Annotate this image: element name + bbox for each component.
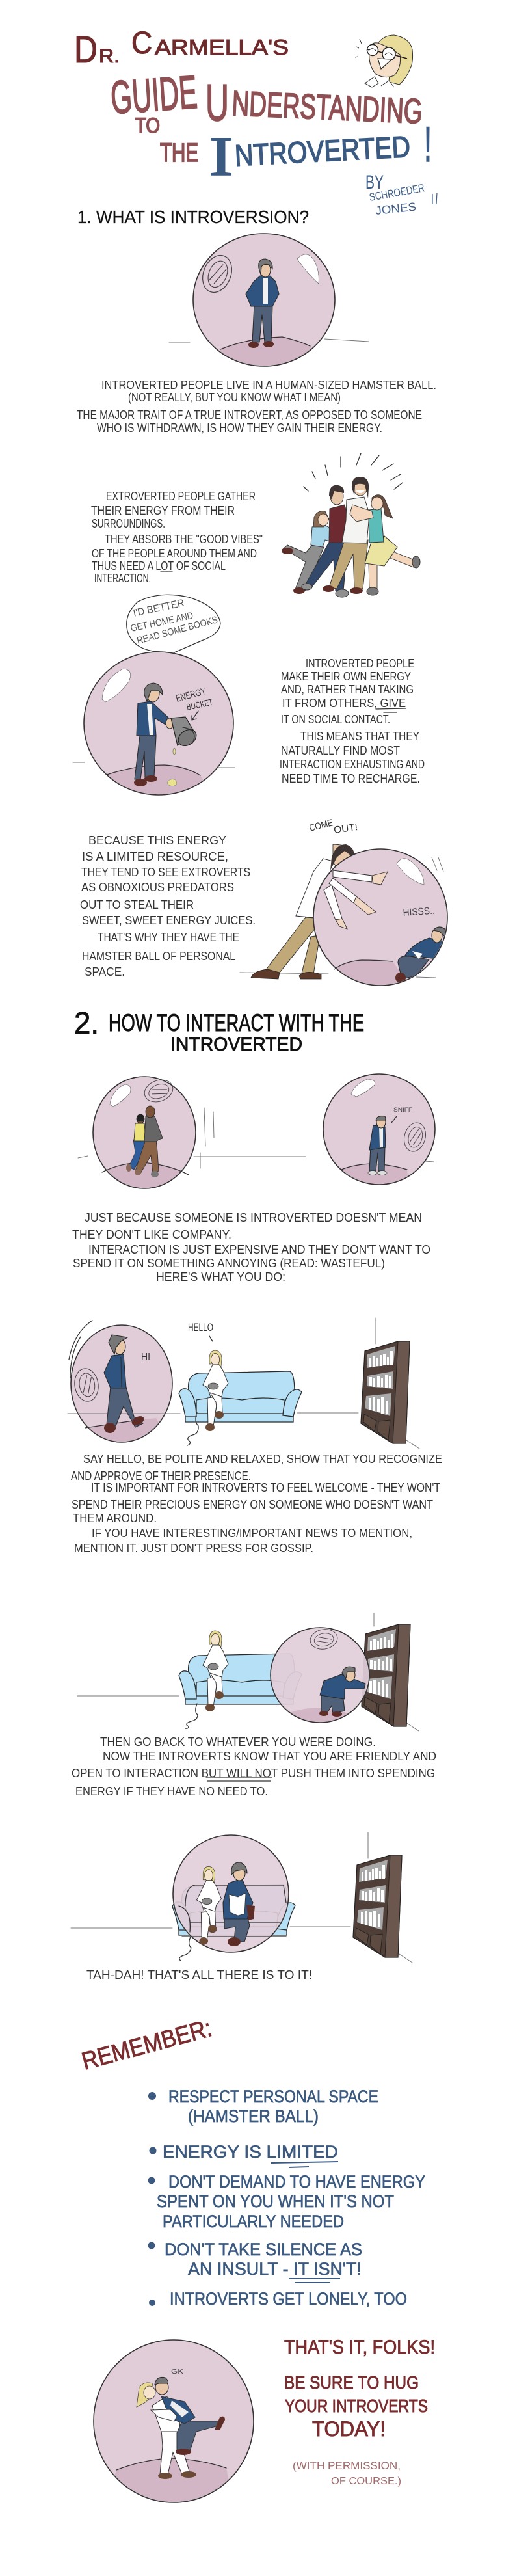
byline: [365, 172, 437, 217]
panel: extrovert pressing on hamster ball: [240, 817, 447, 995]
cord: [179, 1937, 191, 1961]
panel: introvert walks past doctor on couch: [68, 1318, 419, 1451]
text block: go back: OPEN TO INTERACTION BUT WILL NOT PUSH THEM INTO SPENDING: [72, 1767, 435, 1780]
text block: limited resource: BECAUSE THIS ENERGY: [88, 834, 226, 847]
title line: Dr. Carmella's: D: [74, 29, 98, 71]
cord: [185, 1704, 198, 1728]
text block: closing message: YOUR INTROVERTS: [285, 2396, 428, 2416]
point: silence is no insult: DON'T TAKE SILENCE AS: [165, 2240, 362, 2259]
title line: Introverted!: I: [209, 125, 233, 187]
ball floor: [108, 765, 203, 794]
point: energy is limited: ENERGY IS LIMITED: [163, 2142, 338, 2162]
cord: [187, 1412, 198, 1445]
ball floor: [342, 1164, 408, 1184]
ball logo: [198, 251, 237, 297]
caption: hi: HI: [141, 1352, 150, 1363]
text block: extroverts: EXTROVERTED PEOPLE GATHER: [106, 490, 256, 503]
text block: say hello: SPEND THEIR PRECIOUS ENERGY ON SOMEONE WHO DOESN'T WANT: [72, 1498, 433, 1511]
text block: introverts make energy: IT FROM OTHERS, GIVE: [282, 697, 406, 710]
text block: tah-dah: TAH-DAH! THAT'S ALL THERE IS TO IT!: [86, 1968, 312, 1981]
heading: 2. How to interact with the introverted: HOW TO INTERACT WITH THE: [109, 1010, 364, 1036]
title line: Guide to Understanding: NDERSTANDING: [231, 84, 423, 131]
panel: reading together on couch: [71, 1832, 412, 1963]
text block: limited resource: THEY TEND TO SEE EXTROVERTS: [81, 866, 250, 879]
ball floor: [337, 960, 406, 985]
figure: introvert pouring bucket: [134, 683, 174, 786]
figure: doctor and introvert hugging: [137, 2377, 225, 2479]
label: energy bucket: [175, 686, 214, 720]
title line: Introverted!: !: [424, 117, 432, 172]
text block: introverts make energy: IT ON SOCIAL CONTACT.: [281, 713, 390, 726]
title line: Guide to Understanding: [109, 66, 423, 167]
ball logo: [309, 1628, 339, 1651]
caption: hisss: HISSS..: [403, 906, 435, 919]
figure: doctor seated: [203, 1350, 228, 1431]
text block: closing message: THAT'S IT, FOLKS!: [284, 2337, 435, 2358]
text block: introverts make energy: THIS MEANS THAT THEY: [300, 730, 419, 743]
caption: come out: COME: [308, 817, 334, 834]
text block: extroverts: INTERACTION.: [94, 572, 151, 585]
text block: extroverts: THEY ABSORB THE "GOOD VIBES": [105, 533, 263, 546]
illustration: group of extroverts hugging: [282, 453, 420, 597]
text block: introverts make energy: MAKE THEIR OWN ENERGY: [281, 670, 411, 683]
text block: introverts make energy: NEED TIME TO RECHARGE.: [282, 772, 420, 785]
title line: Introverted!: [209, 117, 432, 187]
text block: limited resource: SPACE.: [85, 965, 125, 978]
caption: sniff: SNIFF: [393, 1107, 413, 1113]
text block: just because: HERE'S WHAT YOU DO:: [156, 1270, 285, 1283]
text block: say hello: AND APPROVE OF THEIR PRESENCE.: [71, 1469, 251, 1483]
figure: introvert crouching: [319, 1667, 365, 1717]
icon: Dr. Carmella portrait: [355, 35, 413, 87]
figure: crouching introvert: [395, 927, 446, 983]
text block: limited resource: IS A LIMITED RESOURCE,: [82, 850, 228, 863]
figure: introvert walking: [104, 1335, 146, 1433]
text block: closing message: BE SURE TO HUG: [284, 2372, 419, 2393]
point: don't demand energy: [148, 2172, 425, 2231]
ball highlight: [351, 1079, 375, 1097]
ball highlight: [297, 254, 319, 284]
caption: hello: HELLO: [188, 1321, 213, 1334]
figure: extrovert arms stretching: [324, 870, 388, 929]
text block: extroverts: SURROUNDINGS.: [92, 517, 165, 530]
figure: introvert sniffling: [368, 1116, 387, 1175]
figure: left woman: [282, 511, 341, 594]
byline: JONES: [375, 200, 417, 217]
title line: Guide to Understanding: U: [205, 74, 229, 131]
heading: 2. How to interact with the introverted: INTROVERTED: [170, 1034, 302, 1055]
text block: with permission: [293, 2460, 401, 2487]
figure: doctor seated: [203, 1631, 228, 1711]
text block: introverts make energy: INTERACTION EXHAUSTING AND: [280, 758, 425, 771]
caption: come out: [308, 817, 358, 836]
ball logo: [141, 1076, 176, 1106]
heading: 2. How to interact with the introverted: [74, 1006, 364, 1055]
ball floor: [114, 2459, 228, 2502]
text block: introverts make energy: INTROVERTED PEOPLE: [306, 657, 414, 670]
ball floor: [90, 1418, 159, 1442]
point: silence is no insult: AN INSULT - IT ISN'T!: [188, 2259, 362, 2279]
title line: Introverted!: NTROVERTED: [234, 129, 411, 172]
text block: limited resource: HAMSTER BALL OF PERSONAL: [82, 950, 235, 963]
ball highlight: [397, 859, 424, 885]
panel: introvert browses the bookcase: [77, 1613, 419, 1731]
heading: remember: REMEMBER:: [79, 2015, 215, 2076]
text block: say hello: MENTION IT. JUST DON'T PRESS FOR GOSSIP.: [74, 1542, 313, 1555]
panel: introvert in hamster ball: [169, 234, 369, 377]
text block: say hello: [71, 1453, 442, 1555]
text block: go back: [72, 1736, 436, 1798]
speech bubble: READ SOME BOOKS: [136, 614, 219, 647]
title line: Guide to Understanding: TO: [135, 114, 160, 137]
text block: introduction: THE MAJOR TRAIT OF A TRUE INTROVERT, AS OPPOSED TO SOMEONE: [77, 409, 422, 422]
ball highlight: [110, 1084, 131, 1107]
point: respect personal space: (HAMSTER BALL): [188, 2106, 319, 2126]
bookcase: [362, 1624, 410, 1726]
text block: with permission: (WITH PERMISSION,: [293, 2460, 401, 2472]
figure: doctor seated: [197, 1866, 221, 1945]
text block: just because: INTERACTION IS JUST EXPENSIVE AND THEY DON'T WANT TO: [88, 1243, 430, 1256]
text block: say hello: IF YOU HAVE INTERESTING/IMPORTANT NEWS TO MENTION,: [92, 1527, 412, 1540]
bookcase: [361, 1341, 410, 1443]
speech bubble: GET HOME AND: [129, 610, 194, 634]
text block: extroverts: THEIR ENERGY FROM THEIR: [91, 504, 235, 517]
title line: Dr. Carmella's: [74, 26, 289, 71]
text block: limited resource: THAT'S WHY THEY HAVE THE: [98, 931, 239, 944]
text block: extroverts: [91, 490, 263, 585]
text block: introverts make energy: AND, RATHER THAN TAKING: [281, 683, 414, 696]
figure: man in maroon shirt: [302, 485, 349, 597]
text block: with permission: OF COURSE.): [331, 2476, 401, 2487]
text block: limited resource: [80, 834, 256, 978]
speech bubble: [127, 595, 220, 662]
text block: introverts make energy: NATURALLY FIND MOST: [281, 744, 400, 757]
panel: doctor hugging introvert in hamster ball: [94, 2340, 254, 2511]
text block: just because: JUST BECAUSE SOMEONE IS INTROVERTED DOESN'T MEAN: [85, 1211, 422, 1224]
text block: limited resource: AS OBNOXIOUS PREDATORS: [81, 881, 234, 894]
bookcase: [353, 1855, 402, 1957]
text block: say hello: THEM AROUND.: [73, 1512, 157, 1525]
caption: come out: OUT!: [333, 822, 358, 836]
couch: [179, 1371, 302, 1422]
text block: introduction: INTROVERTED PEOPLE LIVE IN A HUMAN-SIZED HAMSTER BALL.: [101, 379, 436, 392]
point: energy is limited: [150, 2142, 338, 2167]
text block: limited resource: OUT TO STEAL THEIR: [80, 898, 194, 911]
text block: closing message: TODAY!: [312, 2417, 386, 2441]
byline: BY: [365, 172, 384, 193]
point: don't demand energy: DON'T DEMAND TO HAVE ENERGY: [168, 2172, 425, 2192]
text block: just because: [72, 1211, 430, 1283]
text block: closing message: [284, 2337, 435, 2441]
text block: just because: THEY DON'T LIKE COMPANY.: [72, 1228, 231, 1241]
figure: extrovert body: [251, 844, 355, 979]
title line: Guide to Understanding: THE: [160, 139, 198, 167]
text block: go back: NOW THE INTROVERTS KNOW THAT YOU ARE FRIENDLY AND: [103, 1750, 436, 1763]
ball floor: [108, 1163, 181, 1188]
figure: introvert standing: [246, 259, 279, 348]
text block: limited resource: SWEET, SWEET ENERGY JUICES.: [82, 914, 256, 927]
text block: introduction: WHO IS WITHDRAWN, IS HOW THEY GAIN THEIR ENERGY.: [97, 422, 382, 435]
figure: centre man: [323, 477, 369, 594]
point: introverts get lonely: INTROVERTS GET LONELY, TOO: [170, 2289, 407, 2309]
icon: energy bucket: [167, 717, 200, 786]
list: remember points: [148, 2087, 425, 2309]
panel: couple in a hamster ball: [78, 1076, 306, 1197]
panel: introvert with energy bucket: [73, 595, 235, 807]
figure: introvert reading: [223, 1862, 255, 1946]
ball logo: [401, 1120, 429, 1154]
text block: say hello: IT IS IMPORTANT FOR INTROVERTS TO FEEL WELCOME - THEY WON'T: [91, 1481, 440, 1494]
ball floor: [220, 337, 311, 366]
ball logo: [73, 1367, 100, 1402]
caption: hello: [188, 1321, 213, 1341]
point: don't demand energy: PARTICULARLY NEEDED: [163, 2212, 344, 2231]
text block: introverts make energy: [280, 657, 425, 785]
panel: solitary introvert in a hamster ball: [323, 1074, 435, 1197]
title: [74, 26, 437, 217]
caption: gk: GK: [171, 2368, 183, 2376]
heading: 2. How to interact with the introverted: 2.: [74, 1006, 99, 1041]
heading: 1. What is introversion?: 1. WHAT IS INTROVERSION?: [77, 207, 309, 227]
byline: SCHROEDER: [368, 181, 425, 204]
ball highlight: [102, 669, 131, 702]
figure: right woman: [350, 495, 420, 595]
text block: introduction: [77, 379, 436, 435]
text block: extroverts: THUS NEED A LOT OF SOCIAL: [92, 559, 226, 572]
text block: say hello: SAY HELLO, BE POLITE AND RELAXED, SHOW THAT YOU RECOGNIZE: [83, 1453, 442, 1466]
text block: go back: ENERGY IF THEY HAVE NO NEED TO.: [75, 1785, 268, 1798]
title line: Dr. Carmella's: C: [131, 26, 152, 60]
point: silence is no insult: [148, 2240, 362, 2283]
title line: Dr. Carmella's: R.: [99, 46, 120, 67]
title line: Guide to Understanding: GUIDE: [109, 66, 199, 124]
ball floor: [291, 1708, 348, 1722]
point: don't demand energy: SPENT ON YOU WHEN IT'S NOT: [157, 2192, 394, 2211]
couch: [172, 1885, 295, 1935]
text block: just because: SPEND IT ON SOMETHING ANNOYING (READ: WASTEFUL): [73, 1257, 385, 1270]
caption: sniff: [391, 1107, 413, 1123]
figure: couple walking: [126, 1106, 163, 1177]
text block: introduction: (NOT REALLY, BUT YOU KNOW WHAT I MEAN): [128, 391, 341, 404]
text block: extroverts: OF THE PEOPLE AROUND THEM AND: [92, 547, 257, 560]
point: respect personal space: RESPECT PERSONAL SPACE: [168, 2087, 378, 2106]
speech bubble: I'D BETTER: [132, 598, 185, 619]
text block: go back: THEN GO BACK TO WHATEVER YOU WERE DOING.: [100, 1736, 376, 1749]
point: respect personal space: [148, 2087, 378, 2126]
label: energy bucket: BUCKET: [185, 697, 214, 712]
title line: Dr. Carmella's: ARMELLA'S: [155, 35, 289, 59]
label: energy bucket: ENERGY: [175, 686, 207, 704]
couch: [179, 1654, 302, 1704]
